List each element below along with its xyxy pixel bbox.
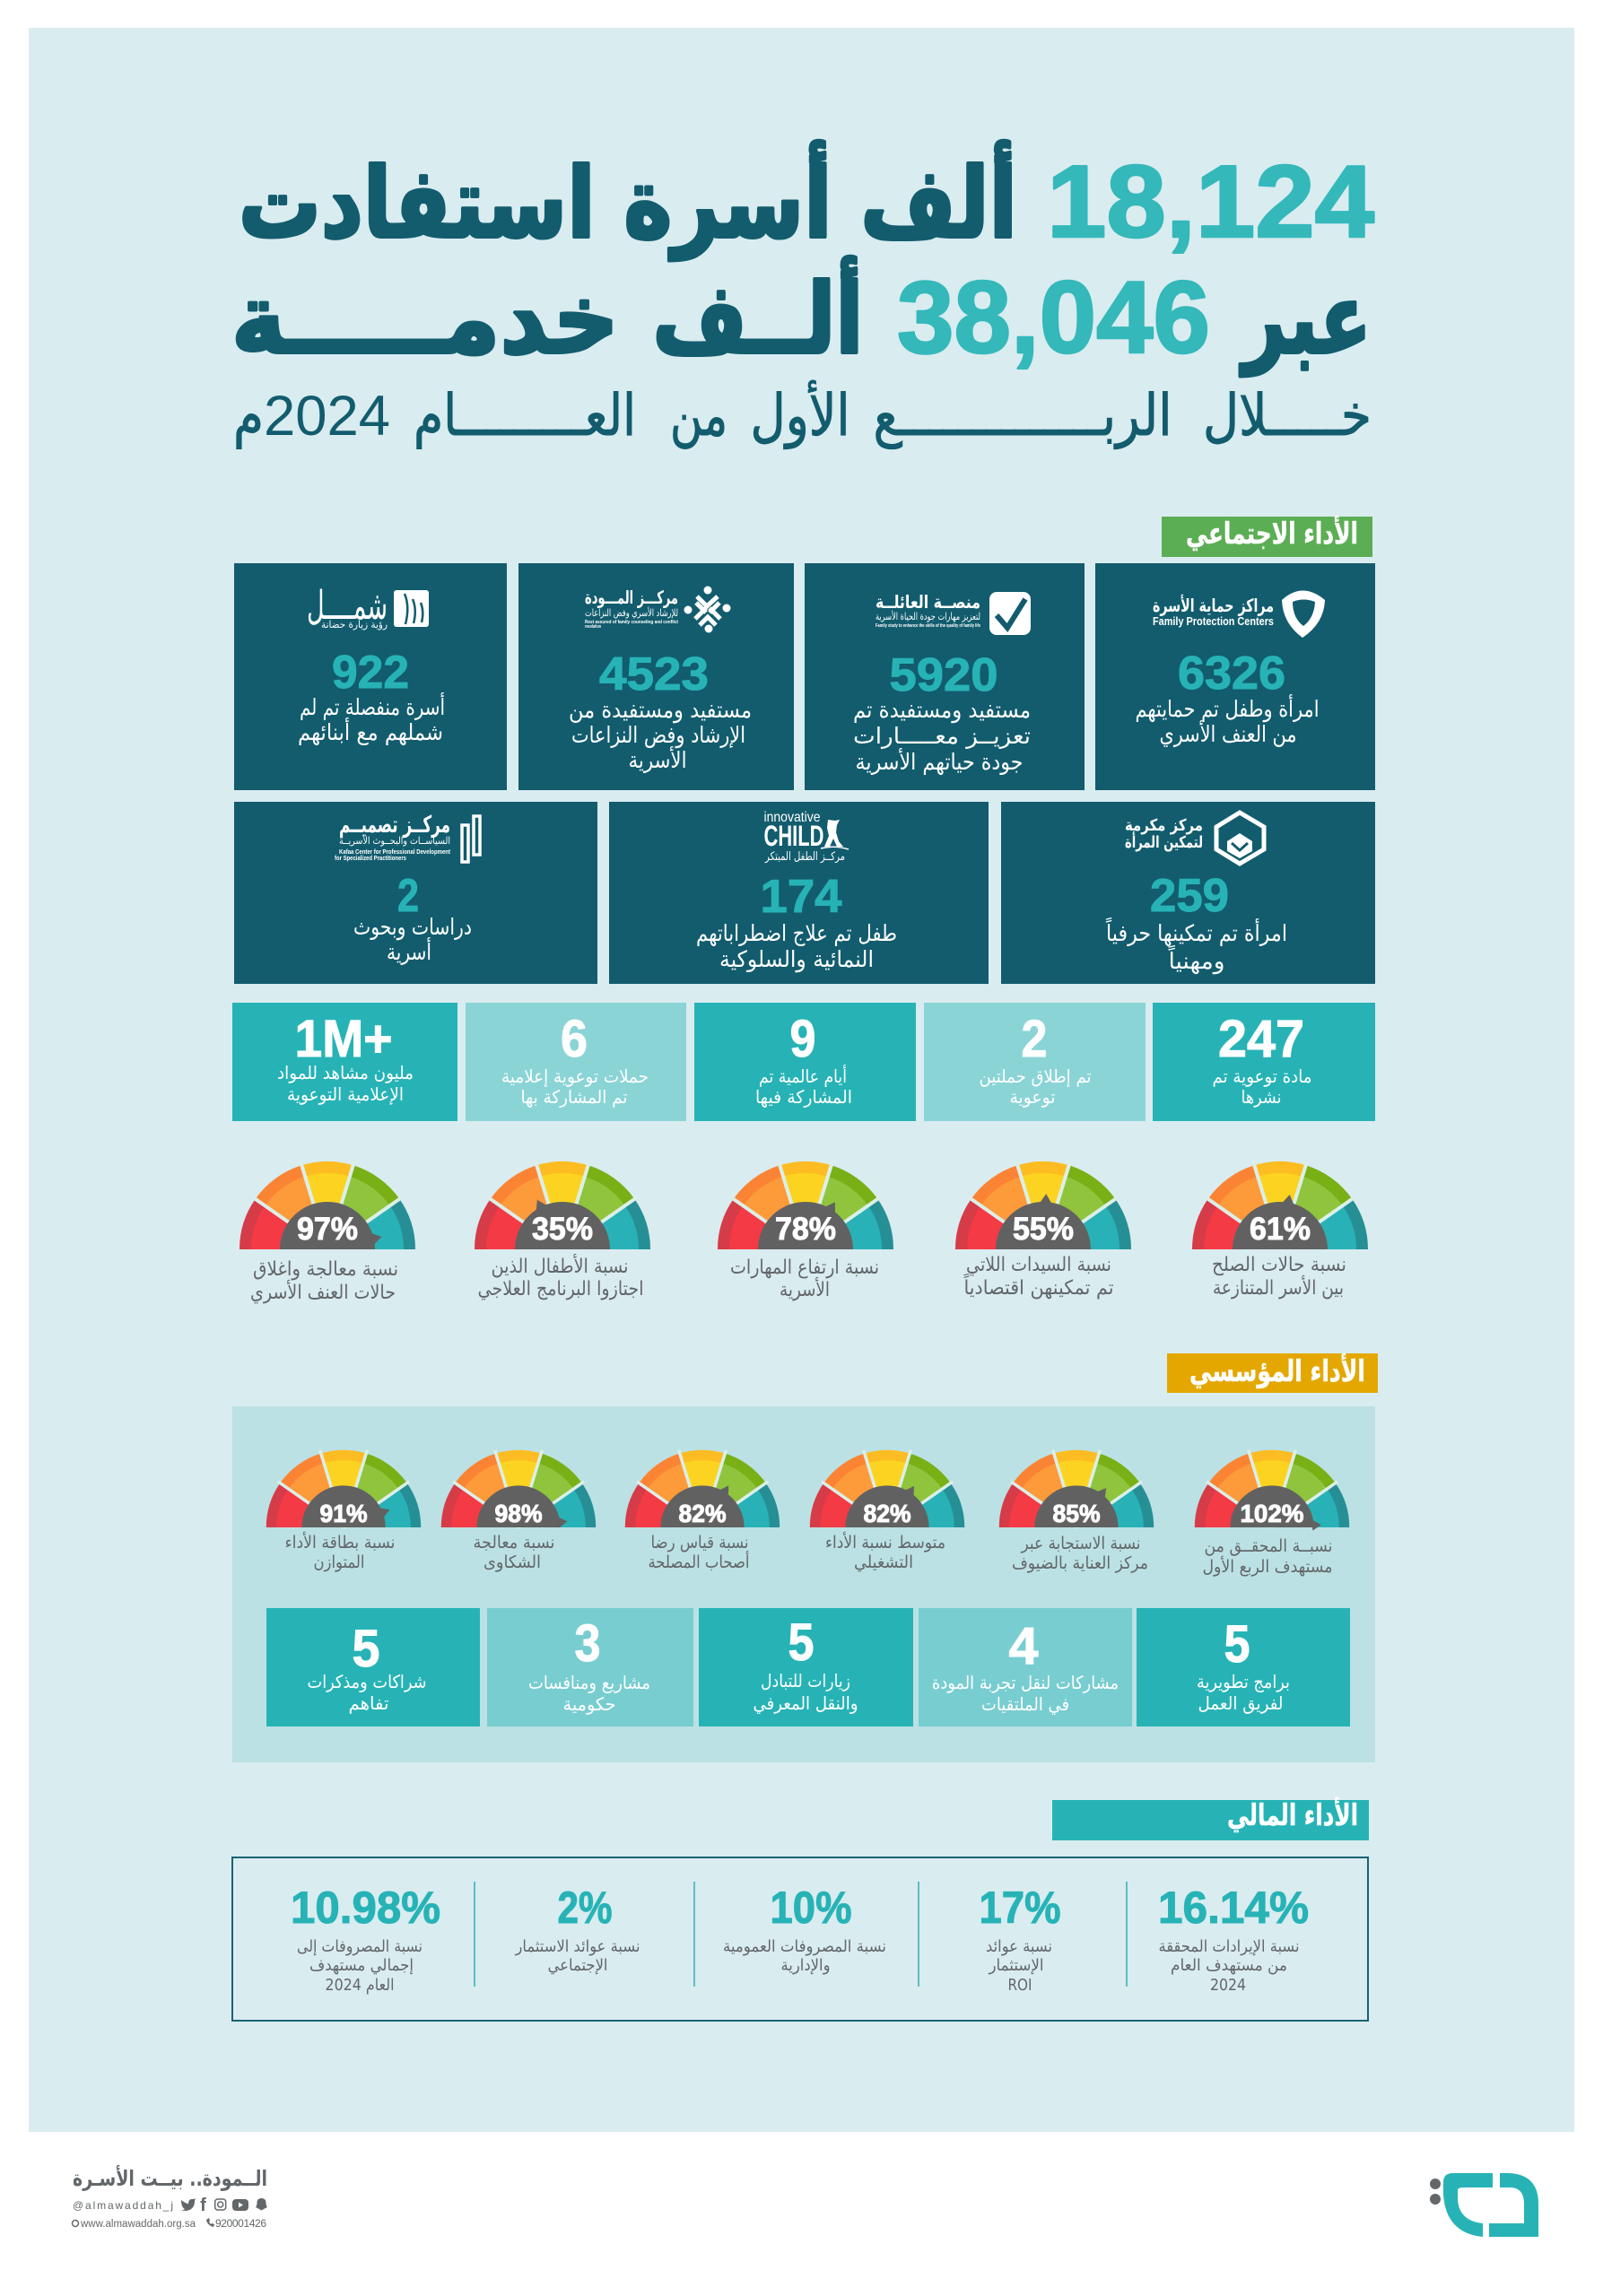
gauge: 97% xyxy=(240,1161,415,1304)
stat tile: 4 participations: في الملتقيات xyxy=(981,1693,1069,1716)
number: 922 xyxy=(332,647,409,699)
logo: family protection centers: مراكز حماية الأسرة xyxy=(1153,594,1274,616)
gauge: 61%: نسبة حالات الصلح xyxy=(1212,1254,1346,1276)
stat tile: 4 participations: مشاركات لنقل تجربة المودة xyxy=(932,1672,1119,1693)
gauge: 35% xyxy=(475,1161,650,1300)
number: 259 xyxy=(1150,870,1229,922)
gauge: 91%: المتوازن xyxy=(314,1552,364,1572)
stat tile: 5 development programs: 5 xyxy=(1224,1615,1250,1674)
panel: mawaddah center card xyxy=(518,563,794,790)
stat tile: 4 participations: 4 xyxy=(1008,1617,1039,1675)
gauge: 97%: حالات العنف الأسري xyxy=(250,1280,396,1304)
stat tile: 2 campaigns: توعوية xyxy=(1010,1086,1055,1108)
gauge: 85% xyxy=(999,1450,1154,1573)
logo: mawaddah center: للإرشاد الأسري وفض النزاعات xyxy=(585,606,678,619)
icon: youtube xyxy=(232,2199,248,2211)
gauge: 82% stakeholders xyxy=(625,1450,780,1572)
logo: family protection centers xyxy=(1153,590,1325,638)
metric: 10%: نسبة المصروفات العمومية xyxy=(723,1937,886,1956)
gauge: 55% xyxy=(955,1161,1131,1300)
logo: makrama center: مركز مكرمة xyxy=(1125,816,1203,835)
metric: 16.14%: نسبة الإيرادات المحققة xyxy=(1159,1937,1299,1956)
social handle: @almawaddah_j xyxy=(73,2199,173,2212)
panel: institutional performance xyxy=(232,1406,1375,1762)
description xyxy=(696,920,897,973)
icon: facebook: f xyxy=(200,2196,206,2215)
logo: mawaddah center: resolution xyxy=(585,624,601,630)
metric: 10.98%: العام 2024 xyxy=(325,1976,395,1995)
panel: visitation center card xyxy=(234,563,507,790)
stat tile: 1M+: 1M+ xyxy=(294,1010,393,1068)
icon: snapchat xyxy=(256,2198,267,2210)
gauge: 78%: 78% xyxy=(775,1212,836,1247)
panel: makrama center card xyxy=(1001,802,1375,984)
gauge: 85%: مركز العناية بالضيوف xyxy=(1012,1553,1148,1573)
description: أسرة منفصلة تم لم xyxy=(300,691,445,721)
number: 4523 xyxy=(599,648,709,700)
logo: almawaddah xyxy=(1430,2173,1538,2237)
footer: contact block xyxy=(72,2165,267,2230)
gauge: 61% xyxy=(1192,1161,1368,1300)
icon: phone xyxy=(206,2218,214,2227)
stat tile: 5 partnerships: شراكات ومذكرات xyxy=(307,1671,427,1692)
gauge: 78%: نسبة ارتفاع المهارات xyxy=(730,1257,879,1279)
stat tile: 5 visits: 5 xyxy=(788,1613,815,1672)
stat tile: 247: مادة توعوية تم xyxy=(1213,1065,1311,1087)
headline line 2 service: خدمـــــة xyxy=(231,264,619,376)
metric: 17%: نسبة عوائد xyxy=(986,1937,1052,1956)
heading: financial performance xyxy=(1052,1796,1369,1840)
metric: 10%: والإدارية xyxy=(780,1956,831,1975)
icon: twitter xyxy=(181,2198,196,2211)
stat tile: 6 media campaigns: 6 xyxy=(561,1010,588,1068)
stat tile: 3 projects xyxy=(487,1608,693,1726)
description xyxy=(298,691,445,746)
logo: family platform: Family study to enhance the skills of the quality of family life xyxy=(876,623,980,629)
number: 5920 xyxy=(890,649,998,701)
metric: 2%: 2% xyxy=(558,1883,612,1933)
gauge: 78%: الأسرية xyxy=(780,1277,830,1301)
logo: mawaddah center: مركـــز المـــودة xyxy=(585,587,678,608)
headline line 1 number: 18,124 xyxy=(1047,145,1374,259)
metric: 10.98%: إجمالي مستهدف xyxy=(309,1956,414,1975)
number: 6326 xyxy=(1178,648,1285,700)
description: الأسرية xyxy=(628,745,687,773)
stat tile: 9 world days xyxy=(694,1003,916,1121)
gauge: 97%: نسبة معالجة واغلاق xyxy=(253,1258,398,1281)
stat tile: 1M+: الإعلامية التوعوية xyxy=(287,1083,404,1105)
gauge: 35%: نسبة الأطفال الذين xyxy=(492,1254,628,1278)
gauge: 102%: مستهدف الربع الأول xyxy=(1202,1556,1333,1577)
stat tile: 5 visits: والنقل المعرفي xyxy=(754,1692,858,1715)
description: تعزيــز معـــــارات xyxy=(853,723,1031,749)
gauge: 35%: اجتازوا البرنامج العلاجي xyxy=(477,1278,644,1300)
stat tile: 3 projects: حكومية xyxy=(563,1693,615,1715)
gauge: 82% operational xyxy=(810,1450,964,1572)
gauge: 98%: 98% xyxy=(495,1500,543,1527)
number: 2 xyxy=(397,870,419,922)
subtitle: 2024 xyxy=(264,385,390,448)
gauge: 85%: نسبة الاستجابة عبر xyxy=(1021,1534,1141,1553)
stat tile: 2 campaigns xyxy=(924,1003,1146,1121)
metric: 17% xyxy=(980,1883,1060,1995)
stat tile: 5 development programs: لفريق العمل xyxy=(1198,1692,1283,1714)
description xyxy=(1105,918,1287,975)
headline line 2 thousand: ألــف xyxy=(653,257,863,376)
description: مستفيد ومستفيدة من xyxy=(569,697,752,724)
logo: design center: Kafaa Center for Professional Development xyxy=(339,848,450,856)
stat tile: 5 development programs xyxy=(1137,1608,1350,1726)
stat tile: 6 media campaigns: حملات توعوية إعلامية xyxy=(501,1065,649,1088)
metric: 16.14%: 16.14% xyxy=(1158,1883,1309,1933)
stat tile: 247 xyxy=(1153,1003,1375,1121)
gauge: 85%: 85% xyxy=(1053,1500,1101,1527)
metric: 2%: نسبة عوائد الاستثمار xyxy=(515,1937,640,1956)
description: ومهنياً xyxy=(1168,945,1225,975)
description: شملهم مع أبنائهم xyxy=(298,717,443,746)
logo: family platform: منصــة العائلــة xyxy=(876,591,980,613)
stat tile: 1M+ xyxy=(232,1003,457,1121)
logo: family platform: لتعزيز مهارات جودة الحياة الأسرية xyxy=(876,610,980,622)
metric: 16.14%: 2024 xyxy=(1210,1976,1246,1995)
description xyxy=(353,914,472,965)
metric: 10%: 10% xyxy=(770,1883,852,1933)
stat tile: 2 campaigns: تم إطلاق حملتين xyxy=(980,1065,1091,1088)
gauge: 97%: 97% xyxy=(297,1212,358,1247)
stat tile: 3 projects: مشاريع ومنافسات xyxy=(528,1672,650,1693)
stat tile: 6 media campaigns: تم المشاركة بها xyxy=(520,1086,628,1108)
logo: family protection centers: Family Protection Centers xyxy=(1153,614,1274,628)
stat tile: 5 partnerships: 5 xyxy=(352,1620,380,1678)
gauge: 98%: نسبة معالجة xyxy=(474,1533,554,1552)
description: امرأة وطفل تم حمايتهم xyxy=(1136,693,1319,723)
description: جودة حياتهم الأسرية xyxy=(856,747,1023,776)
gauge: 102%: 102% xyxy=(1240,1500,1304,1527)
description xyxy=(569,697,752,773)
description: طفل تم علاج اضطراباتهم xyxy=(696,920,897,947)
panel: design center card xyxy=(234,802,597,984)
panel: family protection centers card xyxy=(1095,563,1375,790)
metric: 16.14%: من مستهدف العام xyxy=(1171,1956,1287,1975)
subtitle: العـــــــــام xyxy=(414,383,636,449)
title xyxy=(231,141,1374,449)
gauge: 61%: 61% xyxy=(1250,1212,1311,1247)
subtitle: الأول xyxy=(750,379,850,449)
logo: mawaddah center xyxy=(585,587,730,633)
metric: 10.98% xyxy=(291,1883,440,1995)
gauge: 91%: 91% xyxy=(319,1500,368,1527)
gauge: 55%: نسبة السيدات اللاتي xyxy=(966,1254,1111,1276)
gauge: 61%: بين الأسر المتنازعة xyxy=(1213,1275,1344,1300)
icon: registered mark xyxy=(72,2221,79,2226)
logo: makrama center: لتمكين المرأة xyxy=(1125,831,1203,852)
description: أسرية xyxy=(387,936,431,965)
gauge: 78% xyxy=(718,1161,893,1301)
subtitle: خـــــلال xyxy=(1203,383,1372,449)
logo: design center: for Specialized Practitioners xyxy=(335,854,406,862)
stat tile: 5 partnerships: تفاهم xyxy=(348,1692,389,1714)
gauge: 91%: نسبة بطاقة الأداء xyxy=(285,1532,395,1552)
gauge: 55%: 55% xyxy=(1013,1212,1074,1247)
logo: innovative child xyxy=(764,810,849,864)
panel: family platform card xyxy=(805,563,1085,790)
gauge: 102%: نسبــة المحقــق من xyxy=(1204,1536,1333,1556)
panel: financial performance xyxy=(232,1857,1368,2021)
logo: mawaddah center: Rest assured of family counseling and conflict xyxy=(585,620,678,625)
metric: 16.14% xyxy=(1158,1883,1309,1995)
logo: design center: مركــز تصميــم xyxy=(339,812,450,839)
number: 174 xyxy=(761,871,842,923)
stat tile: 6 media campaigns xyxy=(466,1003,686,1121)
logo: visitation center: شمــــل xyxy=(307,583,388,629)
metric: 10.98%: 10.98% xyxy=(291,1883,440,1933)
logo: design center xyxy=(335,812,480,862)
heading: social performance xyxy=(1162,515,1372,557)
website and phone: www.almawaddah.org.sa xyxy=(80,2219,196,2230)
subtitle: الربــــــــــــــع xyxy=(874,383,1172,449)
gauge: 35%: 35% xyxy=(532,1212,593,1247)
logo: makrama center xyxy=(1125,813,1264,864)
metric: 17%: 17% xyxy=(980,1883,1060,1933)
gauge: 91% xyxy=(266,1450,421,1572)
metric: 17%: ROI xyxy=(1008,1976,1032,1995)
stat tile: 5 development programs: برامج تطويرية xyxy=(1197,1671,1290,1692)
description: الإرشاد وفض النزاعات xyxy=(571,722,745,749)
metric: 2% xyxy=(515,1883,640,1975)
gauge: 82% stakeholders: أصحاب المصلحة xyxy=(648,1551,750,1572)
heading: institutional performance: الأداء المؤسسي xyxy=(1189,1352,1365,1389)
stat tile: 9 world days: المشاركة فيها xyxy=(755,1086,852,1108)
headline line 1 words: ألف أسرة استفادت xyxy=(239,141,1017,261)
description: من العنف الأسري xyxy=(1159,719,1297,747)
icon: instagram xyxy=(215,2199,226,2210)
stat tile: 247: 247 xyxy=(1218,1010,1304,1068)
headline line 2 number: 38,046 xyxy=(897,261,1210,375)
stat tile: 1M+: مليون مشاهد للمواد xyxy=(277,1062,414,1083)
stat tile: 5 partnerships xyxy=(266,1608,480,1726)
description: مستفيد ومستفيدة تم xyxy=(853,697,1031,724)
stat tile: 9 world days: 9 xyxy=(789,1010,816,1068)
description xyxy=(853,697,1031,776)
logo: innovative child: مركــز الطفل المبتكر xyxy=(764,850,845,864)
subtitle: م xyxy=(233,383,264,449)
logo: family platform xyxy=(876,591,1031,635)
metric: 10.98%: نسبة المصروفات إلى xyxy=(297,1937,423,1956)
gauge: 102% xyxy=(1195,1450,1349,1577)
description: النمائية والسلوكية xyxy=(719,946,874,973)
gauge: 98% xyxy=(441,1450,596,1572)
gauge: 82% operational: 82% xyxy=(863,1500,911,1527)
heading: social performance: الأداء الاجتماعي xyxy=(1186,515,1358,551)
heading: financial performance: الأداء المالي xyxy=(1227,1796,1358,1832)
heading: institutional performance xyxy=(1167,1352,1378,1393)
logo: innovative child: innovative xyxy=(764,810,821,825)
logo: innovative child: CHILD xyxy=(764,820,823,852)
metric: 2%: الإجتماعي xyxy=(547,1956,608,1975)
subtitle xyxy=(233,379,1372,449)
headline line 2 word: عبر xyxy=(1240,264,1371,377)
panel: innovative child card xyxy=(609,802,989,984)
metric: 17%: الإستثمار xyxy=(989,1956,1044,1975)
gauge: 82% stakeholders: 82% xyxy=(678,1500,727,1527)
stat tile: 4 participations xyxy=(919,1608,1132,1726)
stat tile: 3 projects: 3 xyxy=(574,1614,601,1673)
gauge: 82% operational: التشغيلي xyxy=(854,1552,913,1572)
description xyxy=(1136,693,1319,747)
stat tile: 9 world days: أيام عالمية تم xyxy=(759,1065,847,1087)
logo: design center: السياســات والبحــوث الأسريــة xyxy=(339,834,450,847)
gauge: 82% operational: متوسط نسبة الأداء xyxy=(825,1532,945,1552)
gauge: 98%: الشكاوى xyxy=(484,1552,541,1572)
stat tile: 5 visits: زيارات للتبادل xyxy=(761,1670,850,1692)
slogan: الــمودة.. بيــت الأسـرة xyxy=(73,2165,267,2191)
stat tile: 2 campaigns: 2 xyxy=(1021,1010,1048,1068)
stat tile: 5 visits xyxy=(699,1608,913,1726)
subtitle: من xyxy=(670,383,727,449)
description: دراسات وبحوث xyxy=(353,914,472,941)
gauge: 55%: تم تمكينهن اقتصادياً xyxy=(963,1273,1114,1300)
logo: visitation center: رؤية زيارة حضانة xyxy=(321,619,388,631)
phone number: 920001426 xyxy=(215,2217,266,2230)
stat tile: 247: نشرها xyxy=(1241,1086,1281,1108)
metric: 10% xyxy=(723,1883,886,1975)
description: امرأة تم تمكينها حرفياً xyxy=(1105,918,1287,947)
gauge: 82% stakeholders: نسبة قياس رضا xyxy=(651,1533,748,1552)
